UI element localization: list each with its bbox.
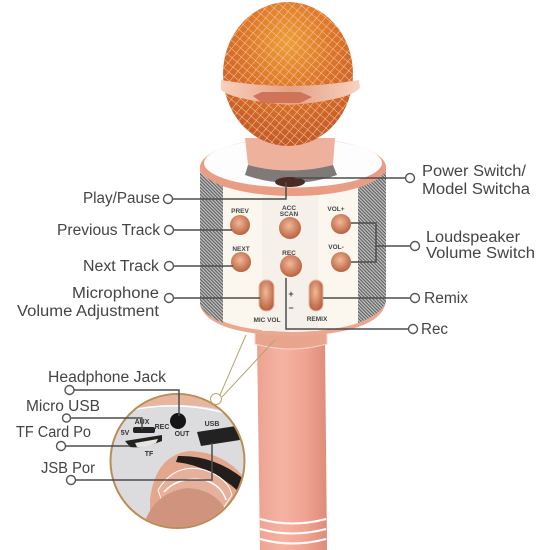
body <box>200 138 386 336</box>
Loudspeaker Volume Switch <box>351 223 535 262</box>
button labels: REMIX <box>307 316 328 323</box>
speaker right <box>358 172 386 323</box>
button labels: PREV <box>231 208 250 215</box>
Play/Pause <box>83 182 286 207</box>
button labels: − <box>288 303 294 313</box>
microphone <box>200 2 386 550</box>
Headphone Jack <box>48 369 179 416</box>
Loudspeaker Volume Switch: Loudspeaker <box>426 229 520 246</box>
Previous Track: Previous Track <box>57 222 160 239</box>
button labels: SCAN <box>280 211 299 218</box>
power button <box>275 177 305 187</box>
inset: port detail <box>110 335 275 530</box>
handle <box>257 340 327 550</box>
inset small circle <box>210 394 222 404</box>
port labels: 5V <box>121 430 130 437</box>
Micro USB <box>26 398 142 429</box>
button labels: MIC VOL <box>253 317 281 324</box>
Remix: Remix <box>424 290 468 307</box>
grille <box>221 2 360 146</box>
TF Card Port <box>16 424 130 450</box>
port labels: REC <box>155 424 169 431</box>
centre panel tint <box>262 190 318 331</box>
button labels: + <box>288 289 294 299</box>
Power Switch <box>295 163 530 198</box>
button labels: ACC <box>282 205 296 212</box>
Previous Track <box>57 222 232 239</box>
button labels: VOL- <box>328 244 344 251</box>
button labels: REC <box>282 250 296 257</box>
top ring <box>200 138 386 196</box>
Play/Pause: Play/Pause <box>83 190 160 207</box>
Micro USB: Micro USB <box>26 398 100 415</box>
button labels: NEXT <box>232 246 250 253</box>
callouts <box>16 163 535 484</box>
port labels: AUX <box>135 419 150 426</box>
Power Switch: Power Switch/ <box>422 163 527 180</box>
port labels: USB <box>205 421 219 428</box>
TF Card Port: TF Card Po <box>16 424 91 441</box>
Microphone Volume Adjustment: Volume Adjustment <box>17 303 160 320</box>
buttons <box>230 214 351 311</box>
Power Switch: Model Switcha <box>422 181 530 198</box>
port labels: TF <box>145 451 154 458</box>
Next Track: Next Track <box>83 258 159 275</box>
speaker left <box>200 172 223 323</box>
port labels: OUT <box>175 431 190 438</box>
Rec <box>286 278 448 338</box>
button labels: VOL+ <box>327 206 345 213</box>
Headphone Jack: Headphone Jack <box>48 369 166 386</box>
Rec: Rec <box>421 321 448 338</box>
collar <box>255 328 327 349</box>
Remix <box>323 290 468 307</box>
Microphone Volume Adjustment: Microphone <box>72 285 159 302</box>
port labels <box>121 419 219 458</box>
Microphone Volume Adjustment <box>17 285 260 320</box>
USB Port: JSB Por <box>41 460 95 477</box>
button labels <box>231 205 345 324</box>
Loudspeaker Volume Switch: Volume Switch <box>426 245 535 262</box>
USB Port <box>41 443 212 484</box>
neck <box>245 138 335 170</box>
Next Track <box>83 258 233 275</box>
